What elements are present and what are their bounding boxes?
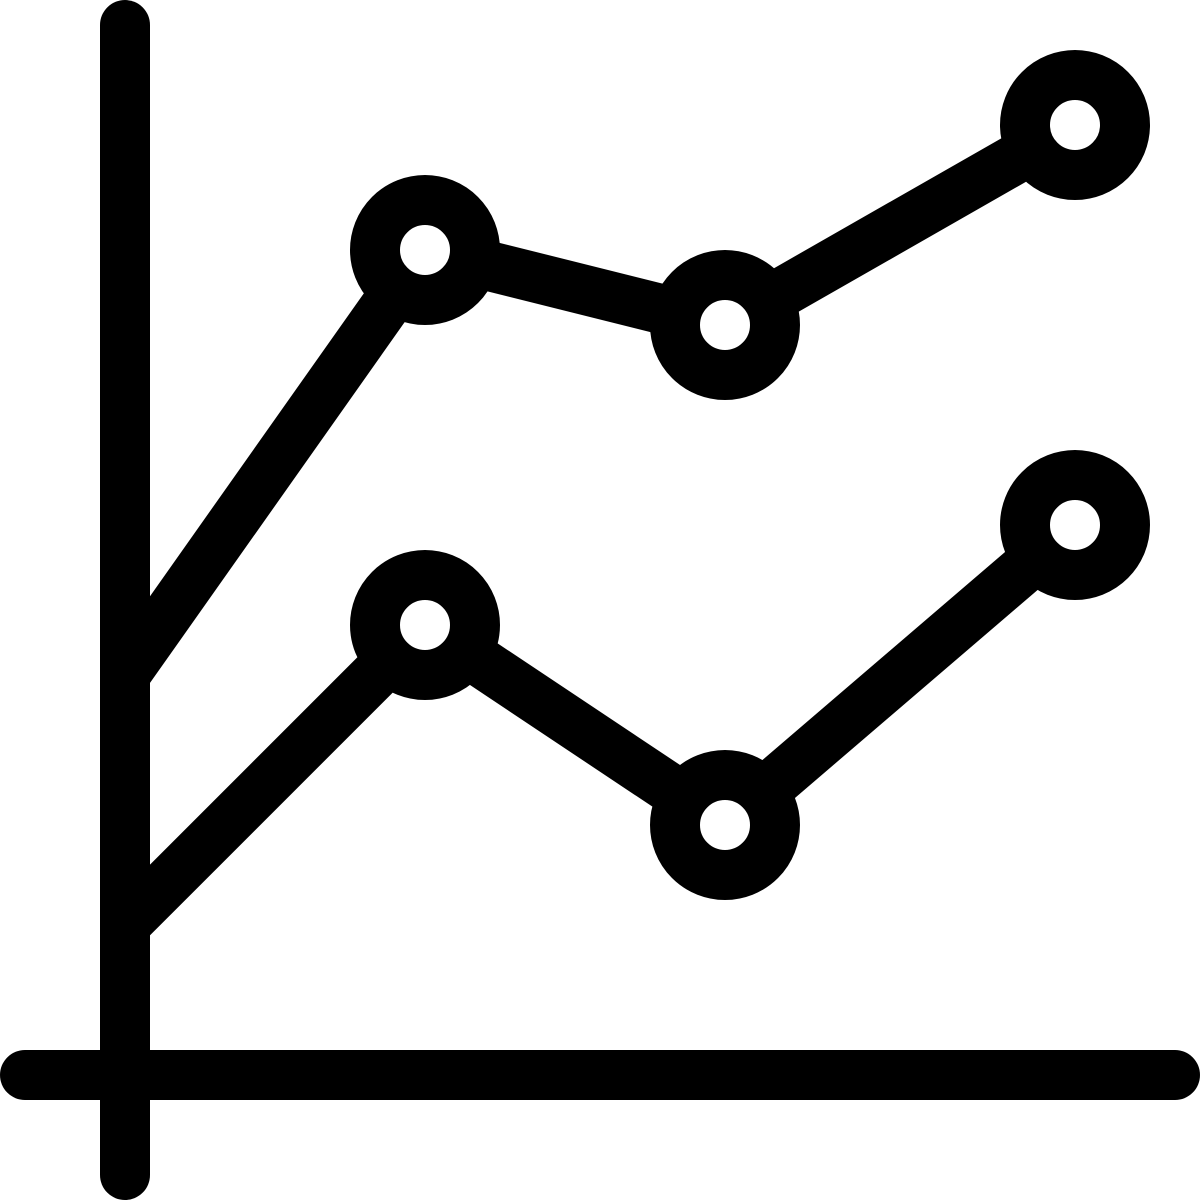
upper series data points: [375, 75, 1125, 375]
horizontal axis: [25, 1050, 1175, 1100]
lower series data points: [375, 475, 1125, 875]
vertical axis: [100, 25, 150, 1175]
lower data series line: [125, 525, 1075, 925]
upper data series line: [125, 125, 1075, 675]
